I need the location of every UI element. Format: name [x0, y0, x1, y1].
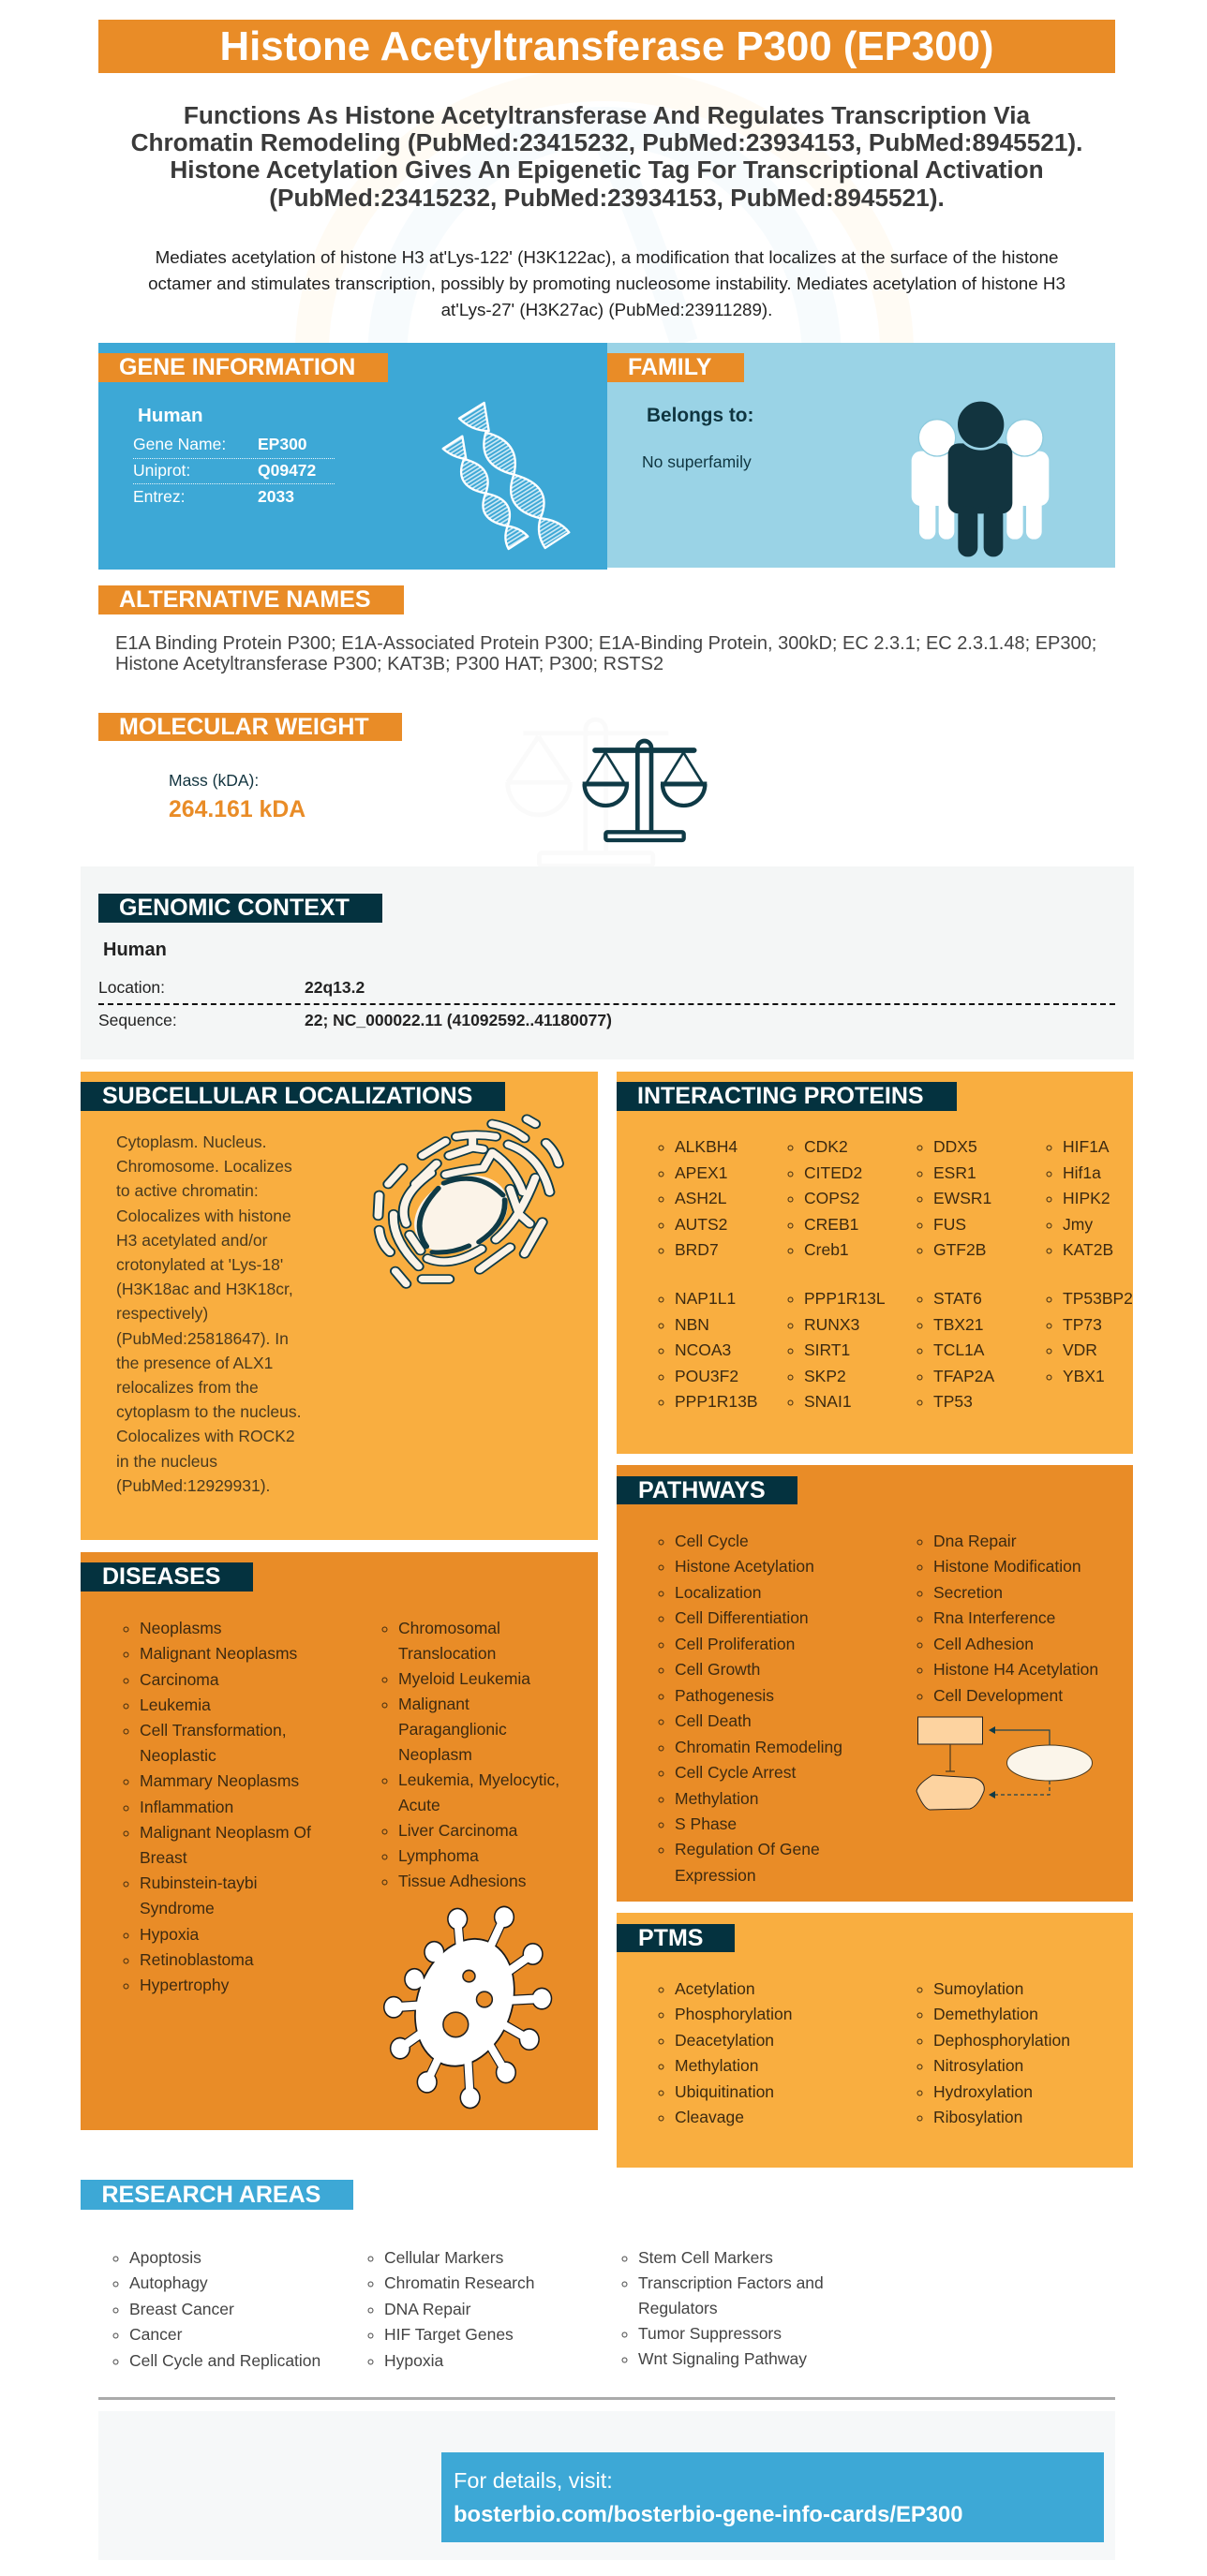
- diseases list left: Rubinstein-taybi: [140, 1873, 257, 1892]
- diseases list left: Retinoblastoma: [140, 1950, 254, 1969]
- localization text: [116, 1133, 301, 1495]
- research areas list column 2: Chromatin Research: [384, 2273, 534, 2292]
- diseases list right: Acute: [398, 1796, 440, 1814]
- PTMs list right: Nitrosylation: [933, 2056, 1023, 2075]
- gene details table: Gene Name:: [133, 435, 226, 453]
- research areas list column 2: HIF Target Genes: [384, 2325, 514, 2344]
- diseases list right: Translocation: [398, 1644, 496, 1663]
- diseases list left: Neoplasms: [140, 1619, 222, 1637]
- localization text: Colocalizes with histone: [116, 1207, 291, 1225]
- panel: family: [607, 343, 1115, 568]
- research areas list column 3: [622, 2248, 824, 2368]
- protein list: PPP1R13L: [804, 1289, 886, 1308]
- PTMs list left: Acetylation: [675, 1979, 755, 1998]
- diseases list left: Hypertrophy: [140, 1976, 229, 1994]
- diseases list left: Leukemia: [140, 1695, 211, 1714]
- pathways list left: Expression: [675, 1866, 756, 1885]
- heading: research areas: RESEARCH AREAS: [101, 2182, 320, 2208]
- diseases list left: Malignant Neoplasm Of: [140, 1823, 311, 1842]
- location row: [98, 978, 365, 997]
- protein list: Hif1a: [1063, 1163, 1101, 1182]
- subtitle: Chromatin Remodeling (PubMed:23415232, PubMed:23934153, PubMed:8945521).: [131, 128, 1082, 156]
- heading: molecular weight: MOLECULAR WEIGHT: [119, 714, 369, 740]
- callout: details link: [441, 2452, 1104, 2542]
- gene details table: Q09472: [258, 461, 316, 480]
- protein list: ESR1: [933, 1163, 976, 1182]
- diseases list left: Mammary Neoplasms: [140, 1771, 299, 1790]
- diseases list left: Inflammation: [140, 1798, 233, 1816]
- pathways list left: Cell Cycle: [675, 1532, 749, 1550]
- research areas list column 1: [112, 2248, 320, 2370]
- protein list: TP73: [1063, 1315, 1102, 1334]
- heading: family: [607, 353, 744, 382]
- function description: [148, 247, 1065, 319]
- function description: at'Lys-27' (H3K27ac) (PubMed:23911289).: [441, 300, 772, 319]
- subtitle: (PubMed:23415232, PubMed:23934153, PubMed:8945521).: [269, 184, 945, 212]
- protein list: PPP1R13B: [675, 1392, 758, 1411]
- icon: group of people: [911, 401, 1050, 556]
- callout: details link: bosterbio.com/bosterbio-gene-info-cards/EP300: [454, 2502, 962, 2527]
- protein list: DDX5: [933, 1137, 977, 1156]
- diseases list right: Myeloid Leukemia: [398, 1669, 530, 1688]
- protein list: EWSR1: [933, 1189, 991, 1207]
- gene details table: Entrez:: [133, 487, 185, 506]
- PTMs list left: [658, 1979, 793, 2126]
- localization text: (PubMed:12929931).: [116, 1476, 270, 1495]
- localization text: Colocalizes with ROCK2: [116, 1427, 295, 1445]
- protein list: NAP1L1: [675, 1289, 736, 1308]
- icon: pathway diagram: [916, 1716, 1093, 1810]
- research areas list column 2: [367, 2248, 534, 2370]
- pathways list right: Histone H4 Acetylation: [933, 1660, 1098, 1679]
- diseases list left: [124, 1619, 311, 1994]
- protein list: Jmy: [1063, 1215, 1093, 1234]
- localization text: Chromosome. Localizes: [116, 1157, 292, 1176]
- diseases list left: Malignant Neoplasms: [140, 1644, 297, 1663]
- function description: octamer and stimulates transcription, possibly by promoting nucleosome instability. Mediates acetylation of histone H3: [148, 274, 1065, 293]
- pathways list left: Chromatin Remodeling: [675, 1738, 842, 1756]
- diseases list right: Leukemia, Myelocytic,: [398, 1770, 559, 1789]
- protein list: YBX1: [1063, 1367, 1105, 1385]
- research areas list column 3: Tumor Suppressors: [638, 2324, 782, 2343]
- panel: pathways: [617, 1465, 1133, 1902]
- protein list: STAT6: [933, 1289, 982, 1308]
- localization text: in the nucleus: [116, 1452, 217, 1471]
- gene details table: Uniprot:: [133, 461, 190, 480]
- molecular weight label: Mass (kDA):: [169, 771, 259, 790]
- protein list: SKP2: [804, 1367, 846, 1385]
- icon: DNA helix: [442, 401, 570, 551]
- protein list: COPS2: [804, 1189, 859, 1207]
- pathways list left: Cell Death: [675, 1711, 752, 1730]
- PTMs list right: [916, 1979, 1070, 2126]
- heading: PTMs: [617, 1924, 735, 1952]
- protein list: [658, 1137, 1133, 1411]
- PTMs list right: Hydroxylation: [933, 2082, 1033, 2101]
- protein list: TBX21: [933, 1315, 984, 1334]
- species label: Human: [103, 940, 167, 960]
- research areas list column 3: Stem Cell Markers: [638, 2248, 773, 2267]
- heading: pathways: [617, 1476, 797, 1504]
- diseases list left: Syndrome: [140, 1899, 215, 1917]
- PTMs list left: Cleavage: [675, 2108, 744, 2126]
- panel: diseases: [81, 1552, 598, 2130]
- sequence row: Sequence:: [98, 1011, 177, 1029]
- alternative names text: [115, 633, 1096, 674]
- pathways list left: Methylation: [675, 1789, 759, 1808]
- location row: 22q13.2: [305, 978, 365, 997]
- protein list: NCOA3: [675, 1340, 731, 1359]
- heading: gene information: GENE INFORMATION: [119, 354, 355, 380]
- alternative names text: Histone Acetyltransferase P300; KAT3B; P300 HAT; P300; RSTS2: [115, 654, 663, 674]
- PTMs list right: Dephosphorylation: [933, 2031, 1070, 2050]
- research areas list column 2: Hypoxia: [384, 2351, 443, 2370]
- protein list: APEX1: [675, 1163, 727, 1182]
- research areas list column 2: Cellular Markers: [384, 2248, 503, 2267]
- protein list: POU3F2: [675, 1367, 738, 1385]
- protein list: Creb1: [804, 1240, 849, 1259]
- diseases list right: Neoplasm: [398, 1745, 472, 1764]
- subtitle: Functions As Histone Acetyltransferase And Regulates Transcription Via: [184, 101, 1030, 129]
- localization text: (H3K18ac and H3K18cr,: [116, 1280, 293, 1298]
- diseases list right: Chromosomal: [398, 1619, 500, 1637]
- pathways list left: Cell Differentiation: [675, 1608, 809, 1627]
- pathways list left: Pathogenesis: [675, 1686, 774, 1705]
- diseases list left: Breast: [140, 1848, 187, 1867]
- PTMs list right: Sumoylation: [933, 1979, 1023, 1998]
- protein list: TP53BP2: [1063, 1289, 1133, 1308]
- panel: genomic context: [81, 866, 1134, 1059]
- sequence row: 22; NC_000022.11 (41092592..41180077): [305, 1011, 612, 1029]
- protein list: CDK2: [804, 1137, 848, 1156]
- subtitle: Histone Acetylation Gives An Epigenetic Tag For Transcriptional Activation: [170, 155, 1044, 184]
- protein list: BRD7: [675, 1240, 719, 1259]
- localization text: crotonylated at 'Lys-18': [116, 1255, 283, 1274]
- research areas list column 3: Transcription Factors and: [638, 2273, 824, 2292]
- diseases list left: Hypoxia: [140, 1925, 199, 1944]
- protein list: RUNX3: [804, 1315, 859, 1334]
- localization text: to active chromatin:: [116, 1181, 259, 1200]
- protein list: KAT2B: [1063, 1240, 1113, 1259]
- diseases list left: Neoplastic: [140, 1746, 216, 1765]
- diseases list left: Cell Transformation,: [140, 1721, 287, 1740]
- heading: interacting proteins: INTERACTING PROTEINS: [637, 1083, 924, 1109]
- research areas list column 1: Autophagy: [129, 2273, 208, 2292]
- pathways list right: Cell Development: [933, 1686, 1063, 1705]
- pathways list right: Dna Repair: [933, 1532, 1017, 1550]
- diseases list right: Liver Carcinoma: [398, 1821, 517, 1840]
- icon: balance scale: [583, 738, 707, 843]
- PTMs list left: Deacetylation: [675, 2031, 774, 2050]
- protein list: VDR: [1063, 1340, 1097, 1359]
- protein list: HIF1A: [1063, 1137, 1110, 1156]
- pathways list left: Cell Cycle Arrest: [675, 1763, 796, 1782]
- species label: Human: [138, 405, 202, 426]
- protein list: CITED2: [804, 1163, 862, 1182]
- protein list: GTF2B: [933, 1240, 986, 1259]
- localization text: (PubMed:25818647). In: [116, 1329, 289, 1348]
- panel: gene information: [98, 343, 607, 570]
- heading: family: FAMILY: [628, 354, 711, 380]
- diseases list right: [382, 1619, 559, 1890]
- gene details table: [133, 435, 335, 506]
- localization text: the presence of ALX1: [116, 1354, 273, 1372]
- protein list: TCL1A: [933, 1340, 984, 1359]
- research areas list column 3: Regulators: [638, 2299, 718, 2317]
- icon: cell nucleus and endoplasmic reticulum: [373, 1115, 564, 1289]
- no superfamily text: No superfamily: [642, 452, 752, 471]
- localization text: Cytoplasm. Nucleus.: [116, 1133, 266, 1151]
- belongs to label: Belongs to:: [647, 405, 753, 426]
- panel: interacting proteins: [617, 1072, 1133, 1454]
- faint background watermark: [296, 73, 913, 343]
- research areas list column 1: Breast Cancer: [129, 2300, 234, 2318]
- gene details table: 2033: [258, 487, 294, 506]
- localization text: H3 acetylated and/or: [116, 1231, 268, 1250]
- pathways list left: Localization: [675, 1583, 761, 1602]
- heading: PTMs: PTMS: [638, 1925, 703, 1951]
- pathways list left: S Phase: [675, 1814, 737, 1833]
- research areas list column 3: Wnt Signaling Pathway: [638, 2349, 807, 2368]
- pathways list left: Regulation Of Gene: [675, 1840, 820, 1858]
- pathways list left: Cell Proliferation: [675, 1635, 795, 1653]
- pathways list right: Rna Interference: [933, 1608, 1055, 1627]
- sequence row: [98, 1011, 612, 1029]
- research areas list column 1: Cancer: [129, 2325, 182, 2344]
- pathways list right: Cell Adhesion: [933, 1635, 1034, 1653]
- protein list: HIPK2: [1063, 1189, 1110, 1207]
- protein list: SIRT1: [804, 1340, 850, 1359]
- PTMs list right: Ribosylation: [933, 2108, 1022, 2126]
- protein list: AUTS2: [675, 1215, 727, 1234]
- panel: footer: [98, 2411, 1115, 2560]
- research areas list column 2: DNA Repair: [384, 2300, 470, 2318]
- title: Histone Acetyltransferase P300 (EP300): [219, 23, 994, 69]
- pathways list right: Histone Modification: [933, 1557, 1081, 1576]
- pathways list left: Cell Growth: [675, 1660, 760, 1679]
- icon: virus: [382, 1905, 553, 2110]
- pathways list left: [658, 1532, 842, 1885]
- heading: diseases: DISEASES: [102, 1563, 220, 1590]
- pathways list left: Histone Acetylation: [675, 1557, 814, 1576]
- PTMs list left: Methylation: [675, 2056, 759, 2075]
- localization text: cytoplasm to the nucleus.: [116, 1402, 301, 1421]
- pathways list right: Secretion: [933, 1583, 1003, 1602]
- heading: genomic context: GENOMIC CONTEXT: [119, 895, 350, 921]
- protein list: ALKBH4: [675, 1137, 738, 1156]
- localization text: relocalizes from the: [116, 1378, 259, 1397]
- panel: subcellular localizations: [81, 1072, 598, 1540]
- protein list: SNAI1: [804, 1392, 852, 1411]
- PTMs list left: Ubiquitination: [675, 2082, 774, 2101]
- alternative names text: E1A Binding Protein P300; E1A-Associated Protein P300; E1A-Binding Protein, 300kD; EC 2.3.1; EC 2.3.1.48; EP300;: [115, 633, 1096, 654]
- heading: pathways: PATHWAYS: [638, 1477, 766, 1503]
- location row: Location:: [98, 978, 165, 997]
- diseases list right: Tissue Adhesions: [398, 1872, 527, 1890]
- heading: diseases: [81, 1562, 253, 1591]
- protein list: CREB1: [804, 1215, 858, 1234]
- panel: PTMs: [617, 1913, 1133, 2168]
- diseases list right: Lymphoma: [398, 1846, 479, 1865]
- heading: subcellular localizations: SUBCELLULAR LOCALIZATIONS: [102, 1083, 472, 1109]
- heading: alternative names: ALTERNATIVE NAMES: [119, 586, 371, 613]
- title: [98, 20, 1115, 73]
- protein list: TP53: [933, 1392, 973, 1411]
- function description: Mediates acetylation of histone H3 at'Lys-122' (H3K122ac), a modification that localizes at the surface of the histone: [156, 247, 1058, 267]
- PTMs list left: Phosphorylation: [675, 2005, 793, 2023]
- diseases list left: Carcinoma: [140, 1670, 219, 1689]
- molecular weight value: 264.161 kDA: [169, 797, 305, 822]
- gene details table: EP300: [258, 435, 307, 453]
- research areas list column 1: Cell Cycle and Replication: [129, 2351, 320, 2370]
- research areas list column 1: Apoptosis: [129, 2248, 201, 2267]
- protein list: ASH2L: [675, 1189, 726, 1207]
- callout: details link: For details, visit:: [454, 2468, 613, 2493]
- protein list: TFAP2A: [933, 1367, 994, 1385]
- diseases list right: Paraganglionic: [398, 1720, 507, 1739]
- localization text: respectively): [116, 1304, 208, 1323]
- PTMs list right: Demethylation: [933, 2005, 1038, 2023]
- subtitle: [131, 101, 1082, 212]
- protein list: FUS: [933, 1215, 966, 1234]
- diseases list right: Malignant: [398, 1695, 469, 1713]
- protein list: NBN: [675, 1315, 709, 1334]
- pathways list right: [916, 1532, 1098, 1705]
